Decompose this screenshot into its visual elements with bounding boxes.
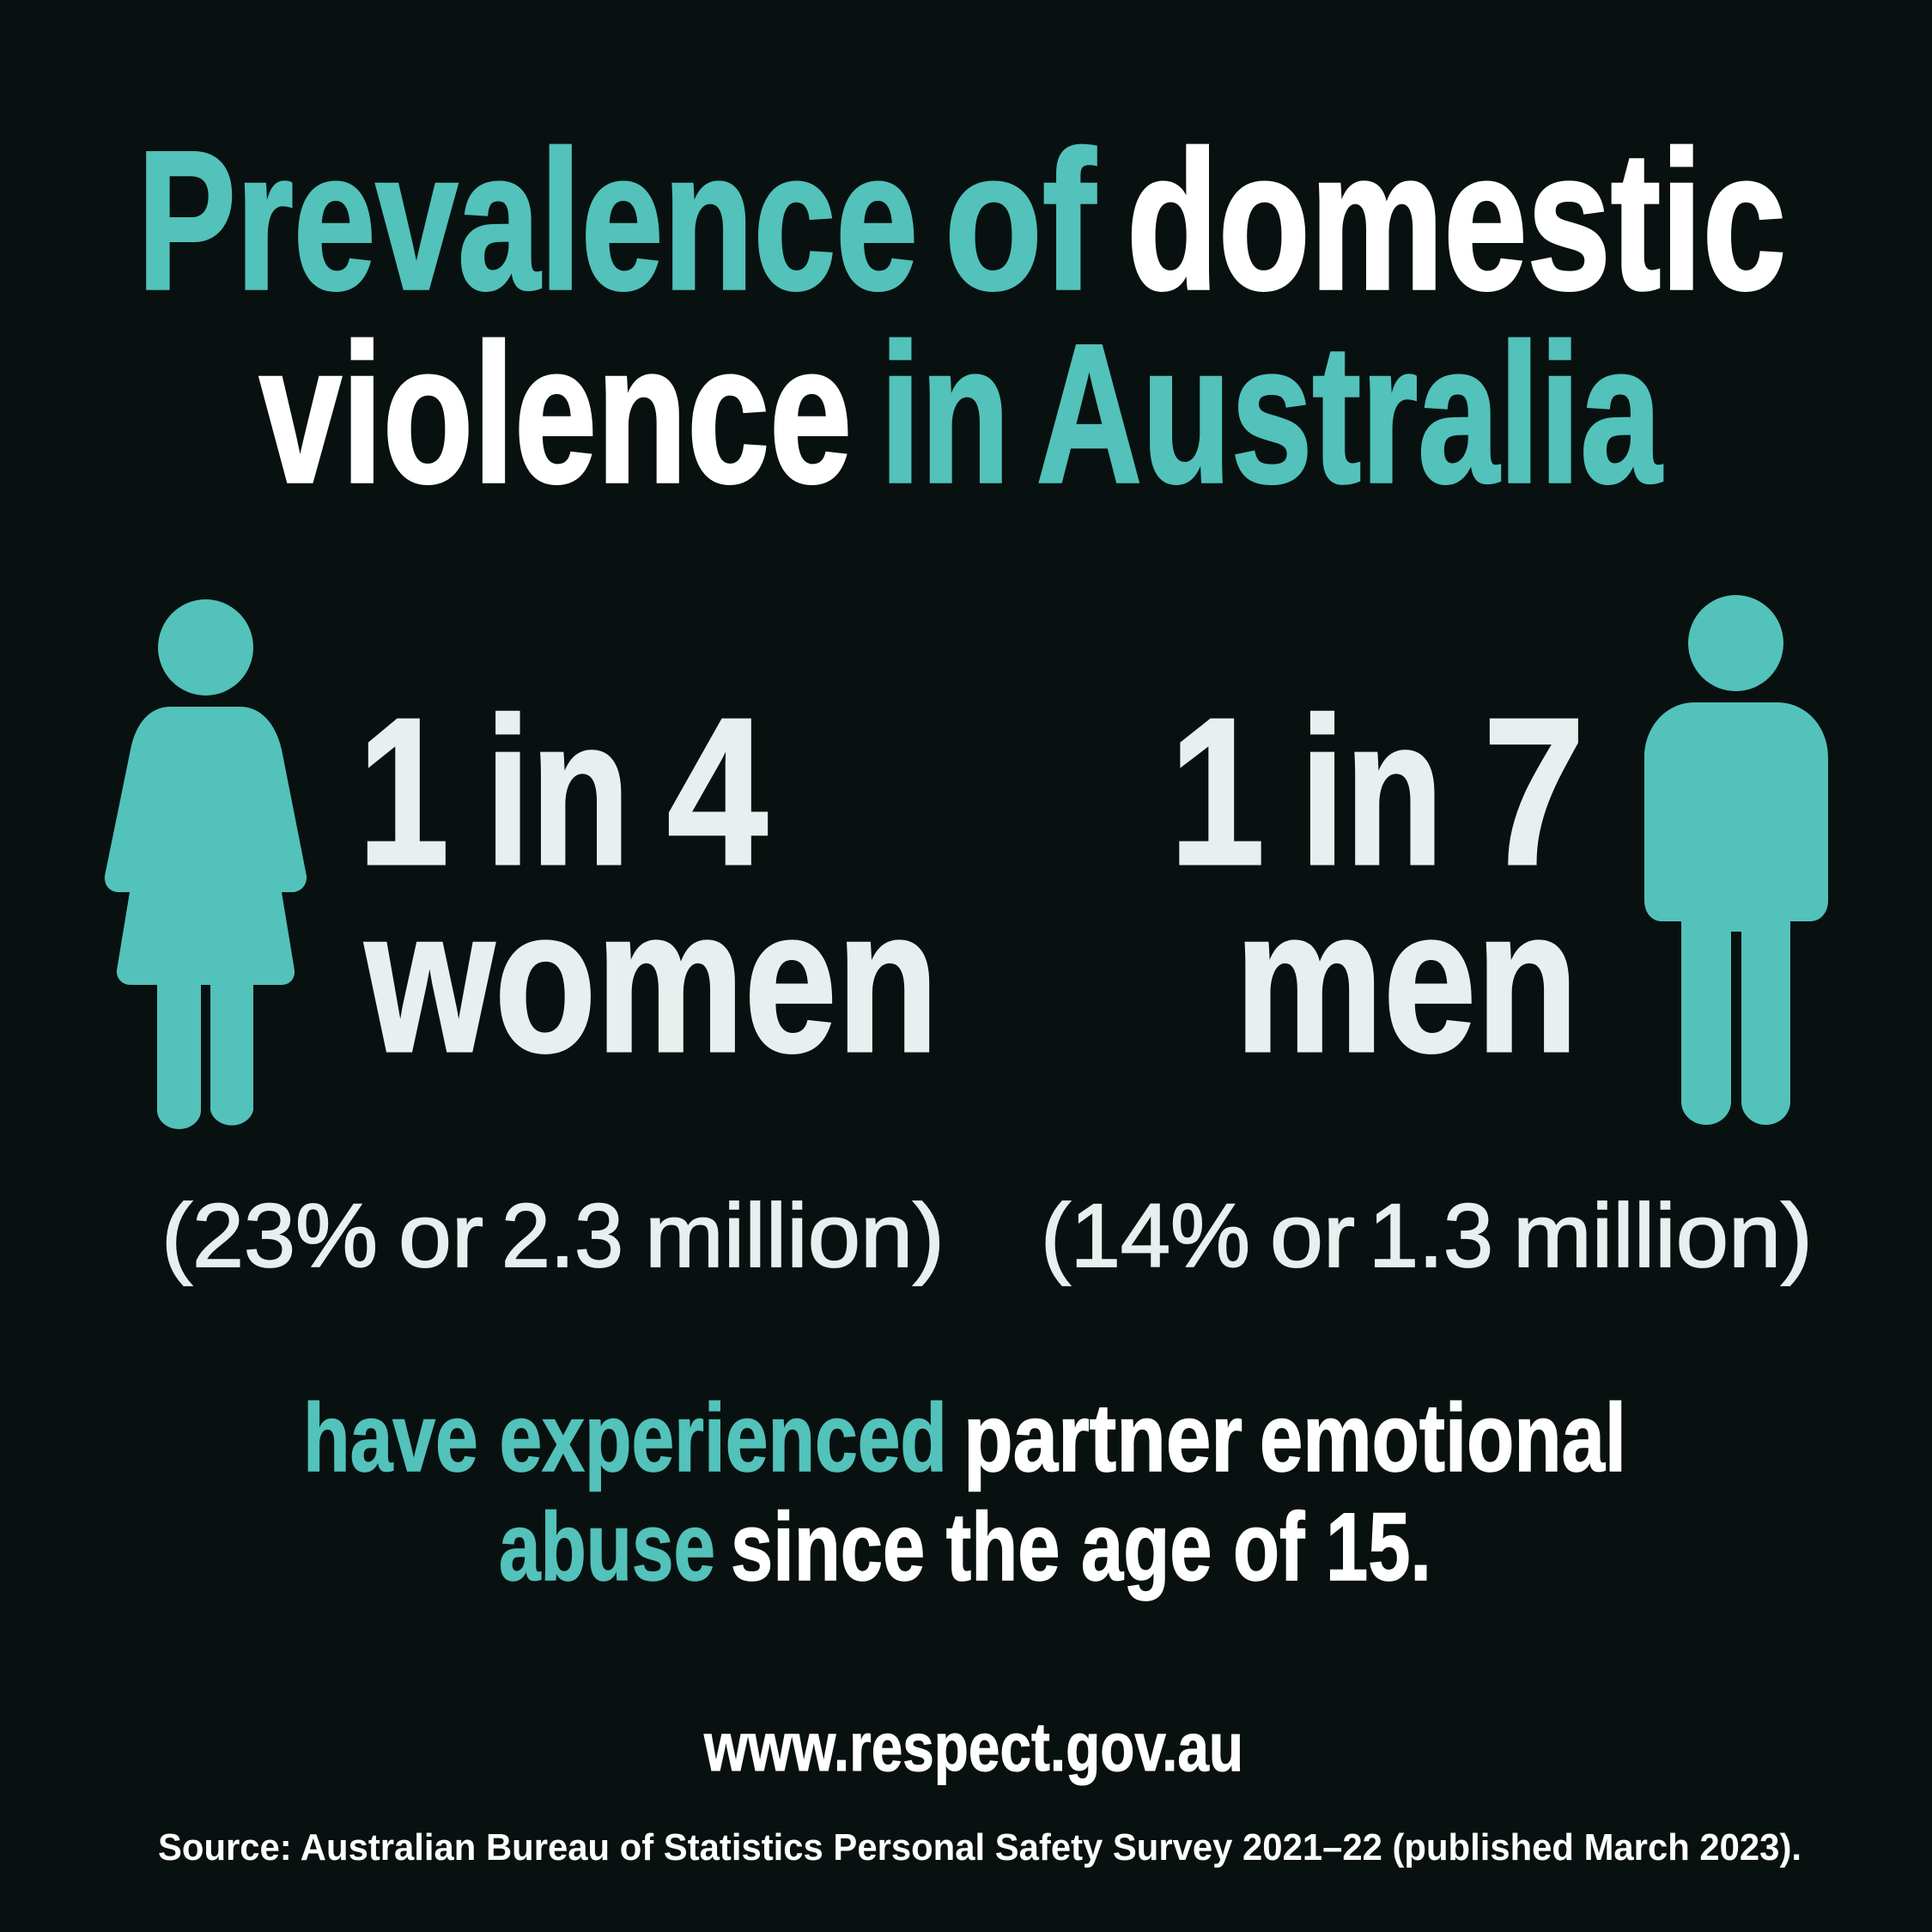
stat: 1 in 4 women: 1 xyxy=(358,674,449,908)
stat: 1 in 4 women: women xyxy=(364,867,939,1095)
women percentage: (23% xyxy=(161,1186,378,1286)
stat: 1 in 4 women: in xyxy=(485,674,630,908)
women percentage: or xyxy=(398,1186,483,1286)
men percentage: 1.3 xyxy=(1369,1186,1493,1286)
stat: 1 in 4 women: 4 xyxy=(667,674,768,908)
stat: 1 in 7 men: men xyxy=(1235,867,1578,1095)
title: of xyxy=(945,110,1097,331)
statement text: abuse xyxy=(499,1493,715,1601)
stat: 1 in 7 men: in xyxy=(1300,674,1443,908)
statement text: have experienced xyxy=(303,1384,947,1492)
women percentage: million) xyxy=(645,1186,945,1286)
icon: man xyxy=(1644,595,1828,1125)
men percentage xyxy=(1041,1186,1813,1286)
stat: 1 in 7 men xyxy=(1170,674,1585,1095)
statement text: partner xyxy=(963,1384,1242,1492)
statement text: emotional xyxy=(1260,1384,1626,1492)
women percentage: 2.3 xyxy=(501,1186,623,1286)
icon: woman xyxy=(105,599,307,1129)
title xyxy=(137,110,1786,524)
title: Prevalence xyxy=(137,110,918,331)
source note: Source: Australian Bureau of Statistics Personal Safety Survey 2021–22 (published March 2023). xyxy=(158,1826,1801,1868)
men percentage: million) xyxy=(1513,1186,1813,1286)
statement text xyxy=(303,1384,1626,1601)
title: Australia xyxy=(1036,303,1663,524)
men percentage: (14% xyxy=(1041,1186,1250,1286)
statement text: since the age of 15. xyxy=(731,1493,1431,1601)
stat: 1 in 7 men: 1 xyxy=(1170,674,1265,908)
women percentage xyxy=(161,1186,945,1286)
stat: 1 in 7 men: 7 xyxy=(1483,674,1585,908)
men percentage: or xyxy=(1270,1186,1355,1286)
stat: 1 in 4 women xyxy=(358,674,939,1095)
title: in xyxy=(880,303,1010,524)
title: violence xyxy=(259,303,852,524)
website: www.respect.gov.au xyxy=(703,1709,1243,1785)
